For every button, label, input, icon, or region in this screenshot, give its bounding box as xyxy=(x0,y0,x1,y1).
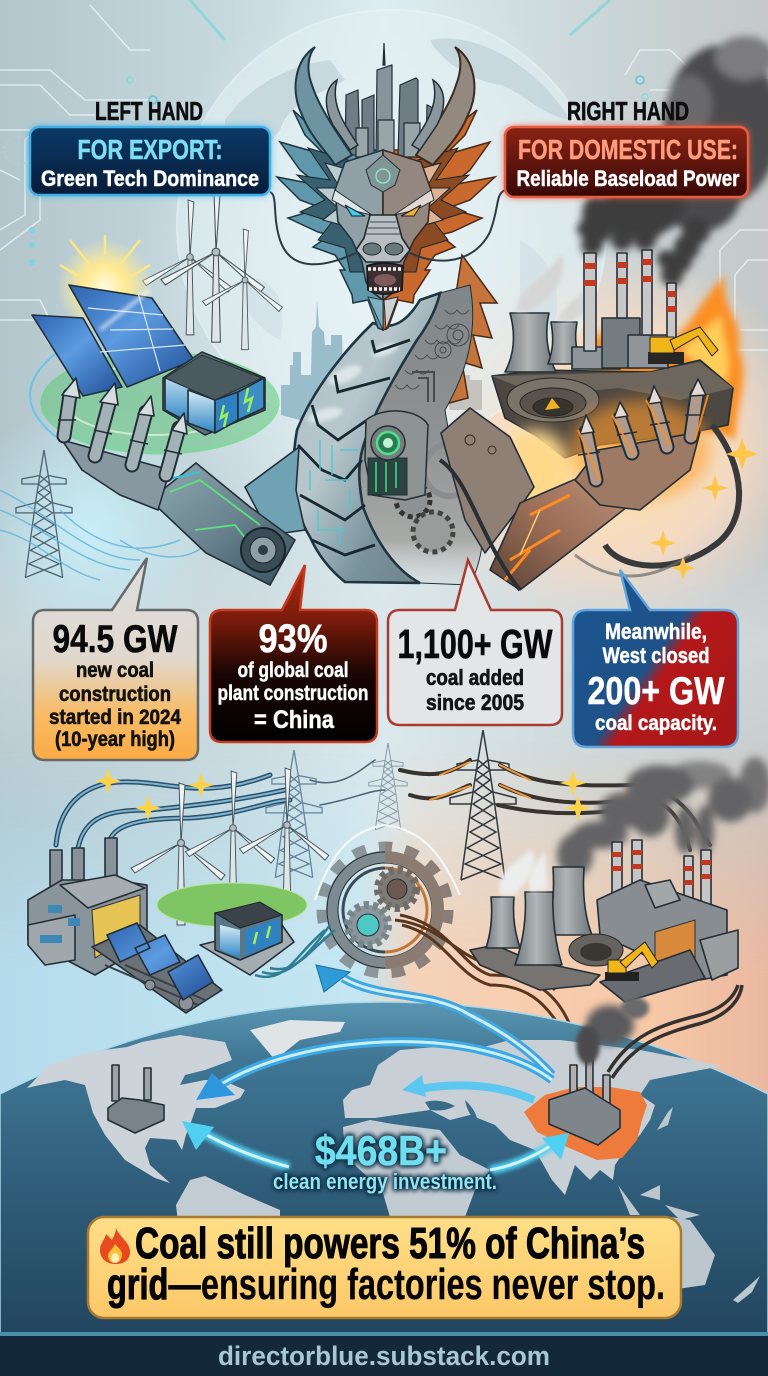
dragon left mane xyxy=(277,110,383,330)
elbow joint xyxy=(241,528,285,572)
callout: 94.5 GW: construction xyxy=(59,683,171,706)
circuit lines: left xyxy=(0,0,768,350)
headline figure: $468B+: $468B+ xyxy=(315,1127,447,1174)
smokestacks xyxy=(584,250,676,351)
icon: blue eye xyxy=(345,205,365,216)
callout: 1,100+ GW: coal added xyxy=(426,665,524,690)
callout: 93%: 93% xyxy=(258,617,328,661)
power plant building xyxy=(572,318,668,369)
dragon armoured body left xyxy=(293,293,440,583)
dragon right neck mane xyxy=(420,255,497,405)
inland seas xyxy=(375,1100,478,1125)
snout xyxy=(356,215,410,262)
panel: world globe xyxy=(0,1002,768,1376)
open-pit mine xyxy=(507,378,599,422)
callout: 94.5 GW: 94.5 GW xyxy=(52,618,178,661)
pylons: lower row xyxy=(266,730,516,880)
scale texture xyxy=(395,310,469,402)
glowing factory door xyxy=(92,895,140,958)
blue power cables xyxy=(56,760,385,848)
icon: left robotic hand xyxy=(58,378,187,510)
hot cables out of gear xyxy=(395,915,570,1035)
callout: West closed 200+ GW: coal capacity. xyxy=(595,712,717,735)
callout: West closed 200+ GW: West closed xyxy=(602,643,710,668)
beard xyxy=(368,297,383,330)
dragon scaled body right xyxy=(359,285,482,585)
body cables xyxy=(440,460,520,590)
icon: flame xyxy=(100,1228,130,1264)
panel: for export: FOR EXPORT: xyxy=(78,134,222,165)
dragon left horn xyxy=(296,47,352,165)
cool cables into gear xyxy=(255,925,335,977)
background globe xyxy=(177,10,607,440)
China highlighted xyxy=(524,1087,647,1160)
callout: 93%: plant construction xyxy=(218,682,368,705)
icon: solar panel back xyxy=(32,315,122,396)
forehead emblem xyxy=(366,155,400,192)
icon: amber eye xyxy=(401,205,421,216)
dragon right horn xyxy=(416,47,474,165)
arrow: over Atlantic to North America xyxy=(196,1042,552,1100)
icon: lower coal pit xyxy=(569,934,623,966)
arrow: from figure to North America xyxy=(182,1121,289,1167)
Australia and islands xyxy=(618,1107,760,1303)
smoke: right top xyxy=(577,36,768,286)
callout: West closed 200+ GW: 200+ GW xyxy=(588,670,725,713)
heading: left hand: LEFT HAND xyxy=(95,96,203,126)
callout: West closed 200+ GW xyxy=(573,570,738,747)
arrows: capital flows xyxy=(182,965,569,1170)
orange power cables xyxy=(400,760,710,850)
green energy disc with sun and solar panels xyxy=(30,235,278,453)
callout: 94.5 GW: new coal xyxy=(76,659,154,682)
arrow: from figure to China xyxy=(490,1133,569,1170)
arrow: to gear xyxy=(316,965,552,1075)
callout: 94.5 GW: (10-year high) xyxy=(55,728,175,751)
callout: 1,100+ GW xyxy=(388,560,562,725)
left energy swirl xyxy=(0,490,210,580)
floating coal island with plant xyxy=(492,250,744,458)
headline figure: $468B+: $468B+ xyxy=(315,1127,447,1174)
armour plate highlights xyxy=(306,341,400,425)
icon: lower excavator xyxy=(605,942,658,981)
icon: lower battery pack xyxy=(200,902,294,975)
coal island rock xyxy=(492,360,733,458)
headline figure: $468B+: clean energy investment. xyxy=(273,1169,497,1194)
icon: excavator xyxy=(648,327,718,364)
left arm xyxy=(150,447,305,585)
right arm xyxy=(440,408,627,590)
icon: turbines lower xyxy=(131,768,329,925)
callout: West closed 200+ GW: Meanwhile, xyxy=(605,619,707,644)
icon: USA factory xyxy=(108,1065,164,1133)
icon: right robotic hand xyxy=(570,379,710,510)
panel: for domestic use xyxy=(505,127,748,197)
callout: 94.5 GW xyxy=(33,558,198,760)
Africa xyxy=(343,1120,490,1217)
headline figure: $468B+: clean energy investment. xyxy=(273,1169,497,1194)
panel: for export xyxy=(30,127,270,195)
icon: central gear xyxy=(315,825,460,972)
footer: directorblue.substack.com xyxy=(218,1341,550,1371)
dragon right mane xyxy=(383,110,495,330)
icon: factory making solar panels xyxy=(28,838,222,1013)
cooling towers xyxy=(505,313,582,372)
icon: cooling towers lower xyxy=(470,850,600,990)
dragon whiskers xyxy=(270,190,505,264)
South America xyxy=(176,1176,280,1240)
callout: 93% xyxy=(210,565,377,742)
icon: wind turbines top xyxy=(142,186,282,350)
brow xyxy=(332,190,372,215)
footer xyxy=(0,1332,768,1376)
white steam xyxy=(516,255,588,322)
callout: 1,100+ GW: since 2005 xyxy=(426,690,524,715)
icon: solar panel front xyxy=(69,285,194,387)
conveyor belt xyxy=(92,925,222,1013)
green patch xyxy=(157,883,307,927)
chest reactor xyxy=(365,411,476,552)
callout: 1,100+ GW: 1,100+ GW xyxy=(398,621,553,667)
icon: battery pack xyxy=(163,352,265,435)
icon: China factory xyxy=(549,1060,620,1145)
callout: 93%: = China xyxy=(254,706,335,734)
mouth xyxy=(367,263,403,294)
panel: dragon xyxy=(270,43,505,585)
mane inner layers xyxy=(297,148,469,272)
panel: coal callout xyxy=(88,1217,681,1318)
arrow: to Europe xyxy=(402,1075,534,1100)
smoke and cable from China factory xyxy=(576,985,742,1078)
inner horns xyxy=(326,80,444,150)
headline figure: $468B+ xyxy=(273,1127,497,1194)
callout: 93%: of global coal xyxy=(238,659,348,682)
Eurasia xyxy=(343,1040,722,1195)
background xyxy=(0,0,768,1093)
icon: coal factory lower xyxy=(597,840,738,1002)
background city silhouette xyxy=(281,300,482,420)
dragon face xyxy=(332,150,434,330)
panel: for export: Green Tech Dominance xyxy=(41,166,259,191)
right energised cable with sparks xyxy=(575,425,758,580)
icon: left transmission tower xyxy=(16,450,72,578)
callout: 94.5 GW: started in 2024 xyxy=(49,706,181,729)
smoke: lower right xyxy=(557,757,768,877)
fire glow xyxy=(590,275,744,450)
dragon skyline crown xyxy=(345,43,433,157)
Greenland xyxy=(250,1020,345,1060)
North America xyxy=(27,1035,245,1183)
heading: right hand: RIGHT HAND xyxy=(567,96,689,126)
sparks on cables xyxy=(95,768,638,821)
